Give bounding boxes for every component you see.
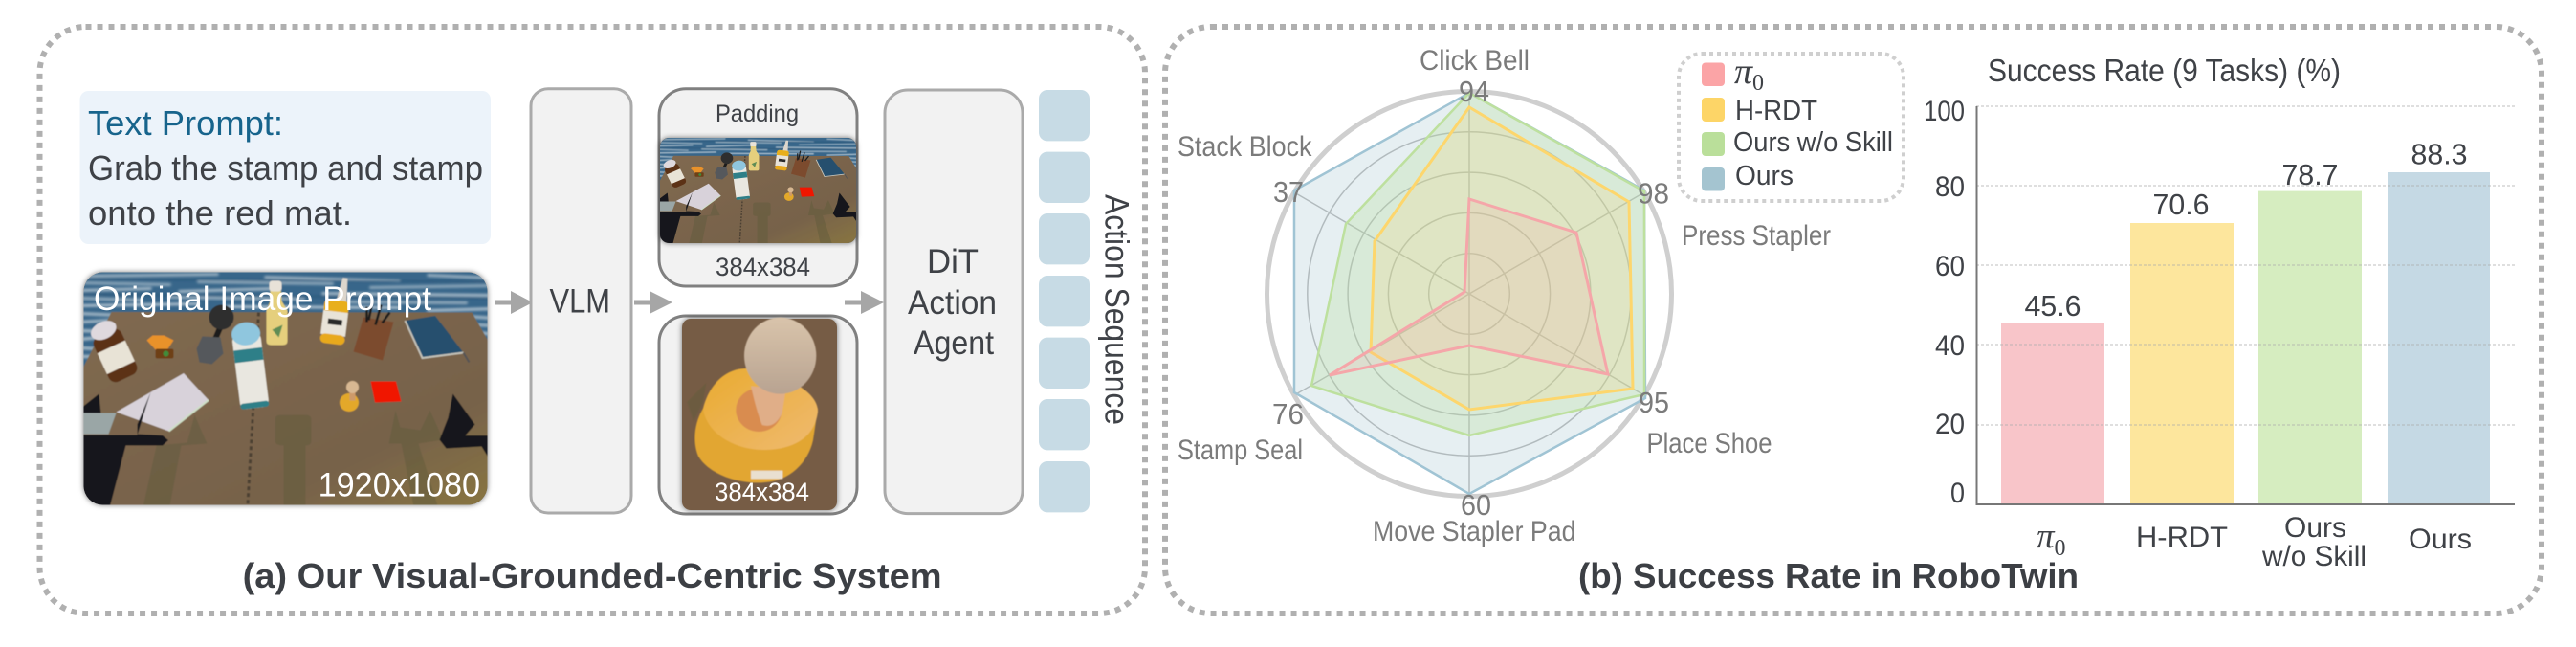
bar values — [2024, 138, 2468, 323]
radar series: Ours w/o Skill — [1311, 93, 1644, 435]
radar labels: Stack Block — [1178, 131, 1312, 163]
y axis labels: 80 — [1935, 171, 1965, 203]
arrow: VLM to crops — [634, 291, 672, 314]
padding crop panel: 384x384 — [716, 253, 810, 281]
radar labels: Stamp Seal — [1178, 435, 1303, 466]
y axis labels: 0 — [1950, 478, 1965, 509]
y axis labels: 60 — [1935, 251, 1965, 282]
DiT action agent box — [885, 90, 1023, 514]
padding crop panel — [656, 89, 860, 286]
legend: π — [1734, 52, 1752, 92]
x axis labels: π — [2037, 517, 2055, 556]
radar labels: 94 — [1459, 75, 1489, 108]
text prompt box: onto the red mat. — [88, 193, 352, 233]
x axis labels: 0 — [2055, 536, 2066, 561]
radar labels — [1178, 45, 1831, 547]
bar: Ours — [2388, 172, 2490, 504]
x axis labels: Ours — [2409, 524, 2472, 555]
radar labels: 76 — [1272, 397, 1304, 431]
bar chart — [1924, 53, 2515, 572]
original image prompt: 1920x1080 — [319, 467, 480, 503]
radar labels: 60 — [1461, 488, 1491, 522]
DiT action agent box: DiT — [927, 243, 979, 280]
radar labels: 95 — [1639, 386, 1669, 419]
radar labels: Move Stapler Pad — [1373, 516, 1576, 547]
zoomed stamp crop panel — [659, 316, 857, 514]
y axis labels: 100 — [1924, 96, 1965, 127]
axes — [1976, 106, 2515, 504]
radar series: H-RDT — [1371, 107, 1633, 410]
padding crop panel: Padding — [716, 100, 799, 127]
radar series: Ours — [1294, 93, 1645, 494]
text prompt box — [80, 91, 491, 244]
bar: H-RDT — [2130, 223, 2234, 504]
VLM box: VLM — [549, 283, 610, 321]
bar: pi0 — [2001, 323, 2104, 504]
action sequence blocks — [1039, 90, 1090, 512]
radar series: pi0 — [1330, 199, 1608, 375]
bar values: 88.3 — [2411, 138, 2468, 170]
radar labels: 98 — [1638, 176, 1669, 211]
legend — [1679, 52, 1904, 201]
legend: H-RDT — [1735, 96, 1817, 126]
text prompt box: Grab the stamp and stamp — [88, 148, 483, 188]
DiT action agent box: Agent — [914, 324, 994, 362]
radar labels: Place Shoe — [1647, 428, 1772, 459]
x axis labels: w/o Skill — [2261, 541, 2367, 572]
x axis labels: Ours — [2284, 512, 2346, 544]
legend: Ours — [1735, 161, 1794, 191]
arrow: crops to agent — [845, 291, 884, 314]
radar chart — [1178, 45, 1831, 547]
bar values: 78.7 — [2282, 158, 2338, 191]
bar values: 70.6 — [2152, 188, 2210, 221]
legend: Ours w/o Skill — [1733, 127, 1893, 158]
original image prompt: Original Image Prompt — [94, 280, 431, 318]
stamp photo — [687, 318, 818, 482]
panel: success rate in RoboTwin — [1165, 27, 2542, 614]
bar values: 45.6 — [2024, 289, 2081, 323]
DiT action agent box: Action — [908, 284, 997, 322]
chart title: Success Rate (9 Tasks) (%) — [1988, 53, 2341, 88]
heading: panel a: (a) Our Visual-Grounded-Centric System — [243, 556, 942, 595]
action sequence label: Action Sequence — [1098, 194, 1135, 425]
bar: Ours w/o Skill — [2258, 191, 2362, 504]
original image prompt — [77, 264, 495, 513]
radar labels: Press Stapler — [1682, 220, 1831, 252]
panel: visual-grounded-centric system — [40, 27, 1145, 614]
x axis labels — [2037, 512, 2472, 572]
y axis labels: 20 — [1935, 409, 1965, 440]
legend: 0 — [1752, 71, 1764, 96]
x axis labels: H-RDT — [2136, 522, 2228, 553]
y axis labels: 40 — [1935, 330, 1965, 362]
VLM box — [531, 89, 631, 513]
text prompt box: Text Prompt: — [88, 103, 283, 143]
radar labels: Click Bell — [1420, 45, 1530, 77]
heading: panel b: (b) Success Rate in RoboTwin — [1578, 556, 2079, 595]
zoomed stamp crop panel: 384x384 — [715, 478, 809, 506]
arrow: image to VLM — [495, 291, 533, 314]
radar labels: 37 — [1273, 175, 1304, 209]
y axis labels — [1924, 96, 1965, 509]
